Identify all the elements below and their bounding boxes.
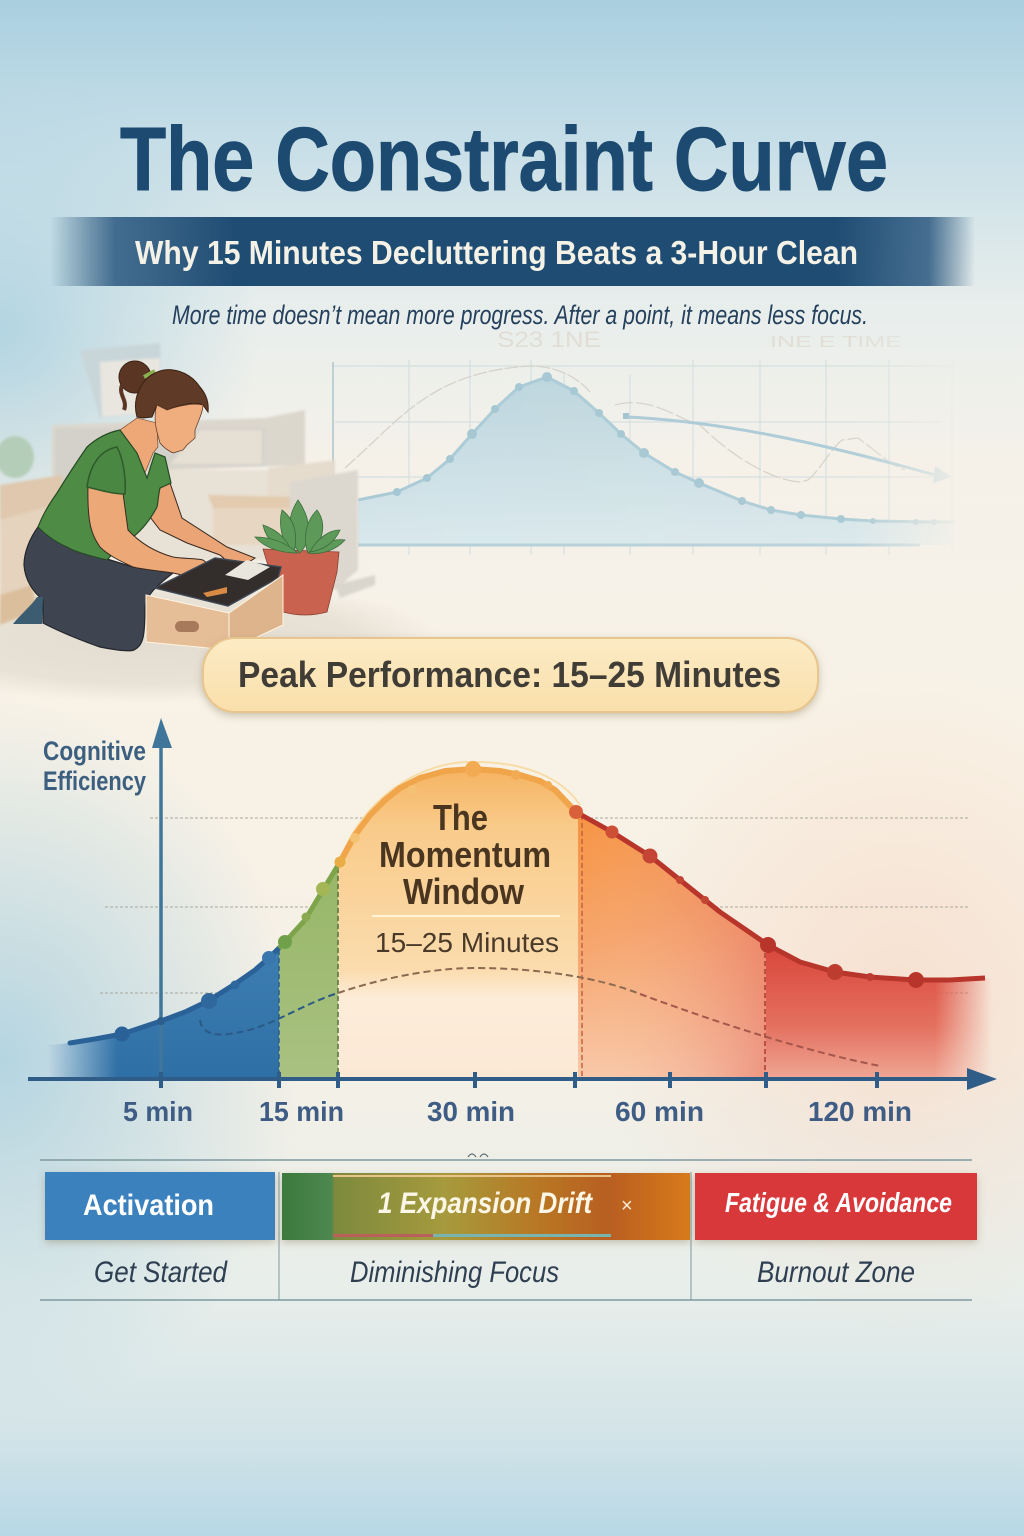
phase captions: Diminishing Focus — [350, 1256, 559, 1289]
hair bun — [119, 361, 155, 410]
trousers — [24, 527, 173, 651]
subtitle banner — [50, 217, 975, 286]
far arm — [150, 483, 255, 570]
y axis — [152, 718, 172, 1080]
hair — [136, 370, 208, 418]
faded chart: trend arrow — [623, 413, 952, 483]
phase: activation: Activation — [83, 1189, 214, 1222]
phase: expansion drift: × — [621, 1195, 633, 1217]
faded chart: grid — [333, 360, 952, 555]
x axis labels: 5 min — [123, 1096, 193, 1127]
faded background chart — [333, 327, 954, 555]
efficiency curve: green segment — [279, 862, 340, 948]
phase captions: Burnout Zone — [757, 1256, 915, 1289]
x axis — [28, 1068, 997, 1090]
momentum window label — [379, 797, 551, 912]
shirt — [38, 430, 171, 560]
x axis labels: 60 min — [615, 1096, 704, 1127]
title: The Constraint Curve — [120, 110, 888, 210]
phase: fatigue and avoidance — [695, 1173, 977, 1240]
x axis labels: 120 min — [808, 1096, 912, 1127]
curve markers — [114, 761, 924, 1042]
faded chart: y axis — [332, 362, 334, 472]
faded chart: dashed curves — [345, 366, 905, 482]
faded chart: filled curve — [358, 377, 954, 545]
faded chart: ghost labels: S23 1NE — [497, 327, 601, 352]
neck — [120, 418, 158, 478]
floor — [0, 578, 440, 702]
momentum window label: Momentum — [379, 834, 551, 875]
face — [155, 404, 203, 453]
table rules — [40, 1154, 972, 1300]
main chart: cognitive efficiency curve — [28, 718, 997, 1127]
efficiency curve: orange segment — [340, 769, 576, 862]
y axis label: Efficiency — [43, 766, 146, 796]
efficiency curve: red segment — [576, 812, 985, 980]
phase: activation — [45, 1172, 275, 1240]
phase captions: Get Started — [94, 1256, 228, 1289]
illustration: woman decluttering — [0, 343, 440, 702]
peak performance callout: Peak Performance: 15–25 Minutes — [238, 654, 781, 695]
storage box — [146, 558, 283, 650]
momentum window duration: 15–25 Minutes — [375, 927, 559, 958]
phase: expansion drift — [282, 1173, 690, 1240]
phase: expansion drift: 1 Expansion Drift — [378, 1187, 594, 1220]
plant pot — [263, 549, 339, 615]
faded chart: curve points — [393, 372, 937, 525]
efficiency curve: blue segment — [70, 948, 279, 1043]
plant leaves — [255, 500, 345, 553]
faded chart: curve outline — [358, 377, 954, 522]
peak performance callout — [203, 638, 818, 712]
subtitle banner: Why 15 Minutes Decluttering Beats a 3-Hour Clean — [135, 234, 858, 271]
momentum window label: Window — [403, 871, 525, 912]
near arm — [88, 485, 222, 587]
zone dividers — [279, 815, 765, 1079]
faded chart: baseline — [358, 544, 920, 546]
zone fills — [48, 760, 996, 1080]
faded chart: ghost labels: INE E TIME — [770, 334, 902, 351]
curve glow — [340, 762, 580, 862]
x axis labels: 15 min — [259, 1096, 344, 1127]
dashed comparison curve — [200, 968, 880, 1066]
y axis label — [43, 736, 146, 796]
faded chart: ghost labels — [498, 332, 901, 347]
sleeve — [87, 447, 125, 494]
y axis label: Cognitive — [43, 736, 146, 766]
room furniture — [0, 343, 375, 625]
x axis labels: 30 min — [427, 1096, 515, 1127]
phase captions — [94, 1256, 915, 1289]
momentum window label: The — [433, 797, 488, 838]
sock — [13, 597, 43, 624]
phase: fatigue and avoidance: Fatigue & Avoidance — [725, 1187, 952, 1218]
x axis labels — [123, 1096, 912, 1127]
dotted reference lines — [100, 818, 970, 993]
phase table — [40, 1154, 977, 1300]
